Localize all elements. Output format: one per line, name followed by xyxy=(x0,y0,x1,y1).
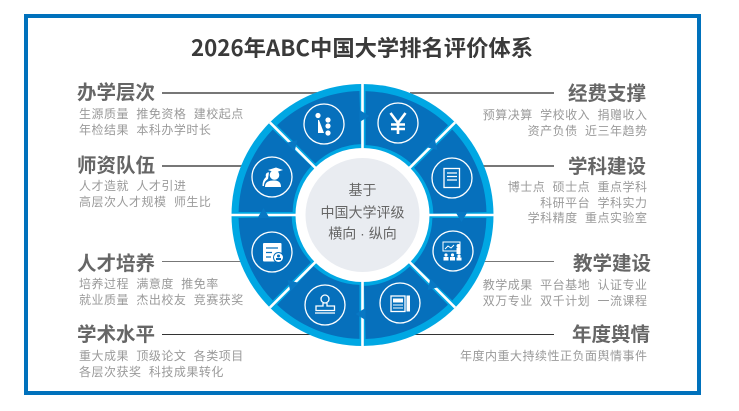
text: 师资队伍 details xyxy=(79,177,211,210)
text: 办学层次 details: 生源质量 推免资格 建校起点 xyxy=(79,105,244,122)
center text: 横向 · 纵向 xyxy=(328,226,397,242)
leader line: 办学层次 xyxy=(162,92,317,94)
text: 办学层次 details xyxy=(79,105,244,138)
text: 学科建设 details: 科研平台 学科实力 xyxy=(540,194,648,210)
heading: 经费支撑: 经费支撑 xyxy=(568,76,646,106)
title: 2026年ABC中国大学排名评价体系 xyxy=(191,31,533,63)
heading: 教学建设: 教学建设 xyxy=(573,246,651,276)
text: 师资队伍 details: 高层次人才规模 师生比 xyxy=(79,192,211,210)
center text: 基于 xyxy=(348,182,376,198)
text: 学术水平 details xyxy=(79,347,244,380)
leader line: 经费支撑 xyxy=(410,92,554,94)
heading: 师资队伍: 师资队伍 xyxy=(77,148,155,178)
wheel sectors xyxy=(214,67,511,363)
text: 办学层次 details: 年检结果 本科办学时长 xyxy=(79,120,211,138)
icon: book xyxy=(432,158,472,198)
icon: yuan xyxy=(378,103,418,143)
text: 人才培养 details xyxy=(79,275,244,308)
text: 经费支撑 details: 资产负债 近三年趋势 xyxy=(528,122,648,138)
text: 教学建设 details xyxy=(483,276,648,308)
icon: newspaper xyxy=(380,283,420,323)
text: 年度舆情 details: 年度内重大持续性正负面舆情事件 xyxy=(460,347,648,364)
icon: teaching xyxy=(433,231,473,271)
leader line: 教学建设 xyxy=(480,260,554,262)
text: 学科建设 details: 博士点 硕士点 重点学科 xyxy=(508,178,648,195)
leader line: 学科建设 xyxy=(480,165,554,166)
center text xyxy=(320,182,404,242)
text: 经费支撑 details xyxy=(483,106,648,138)
leader line: 学术水平 xyxy=(162,334,312,335)
heading: 人才培养: 人才培养 xyxy=(77,246,155,276)
icon: teacher xyxy=(252,157,292,197)
icon: seal stamp xyxy=(305,285,345,325)
icon: exam form xyxy=(252,232,292,272)
text: 人才培养 details: 培养过程 满意度 推免率 xyxy=(79,275,219,292)
text: 教学建设 details: 教学成果 平台基地 认证专业 xyxy=(483,276,648,293)
leader line: 师资队伍 xyxy=(162,165,242,166)
heading: 办学层次: 办学层次 xyxy=(77,76,155,104)
text: 学术水平 details: 各层次获奖 科技成果转化 xyxy=(79,362,224,380)
clockwise arrows between sectors xyxy=(258,110,468,320)
text: 学科建设 details: 学科精度 重点实验室 xyxy=(528,209,648,226)
leader line: 年度舆情 xyxy=(415,334,554,335)
heading: 学术水平: 学术水平 xyxy=(77,318,155,346)
heading: 年度舆情: 年度舆情 xyxy=(572,318,650,346)
text: 学术水平 details: 重大成果 顶级论文 各类项目 xyxy=(79,347,244,364)
heading: 学科建设: 学科建设 xyxy=(568,150,646,178)
text: 教学建设 details: 双万专业 双千计划 一流课程 xyxy=(483,292,648,308)
wheel base ring xyxy=(232,84,494,346)
text: 师资队伍 details: 人才造就 人才引进 xyxy=(79,177,186,194)
text: 人才培养 details: 就业质量 杰出校友 竞赛获奖 xyxy=(79,290,244,308)
text: 经费支撑 details: 预算决算 学校收入 捐赠收入 xyxy=(483,106,648,123)
leader line: 人才培养 xyxy=(162,260,242,262)
text: 学科建设 details xyxy=(508,178,648,226)
icon: school level xyxy=(304,104,344,144)
center text: 中国大学评级 xyxy=(320,204,404,220)
center hub xyxy=(296,148,430,282)
